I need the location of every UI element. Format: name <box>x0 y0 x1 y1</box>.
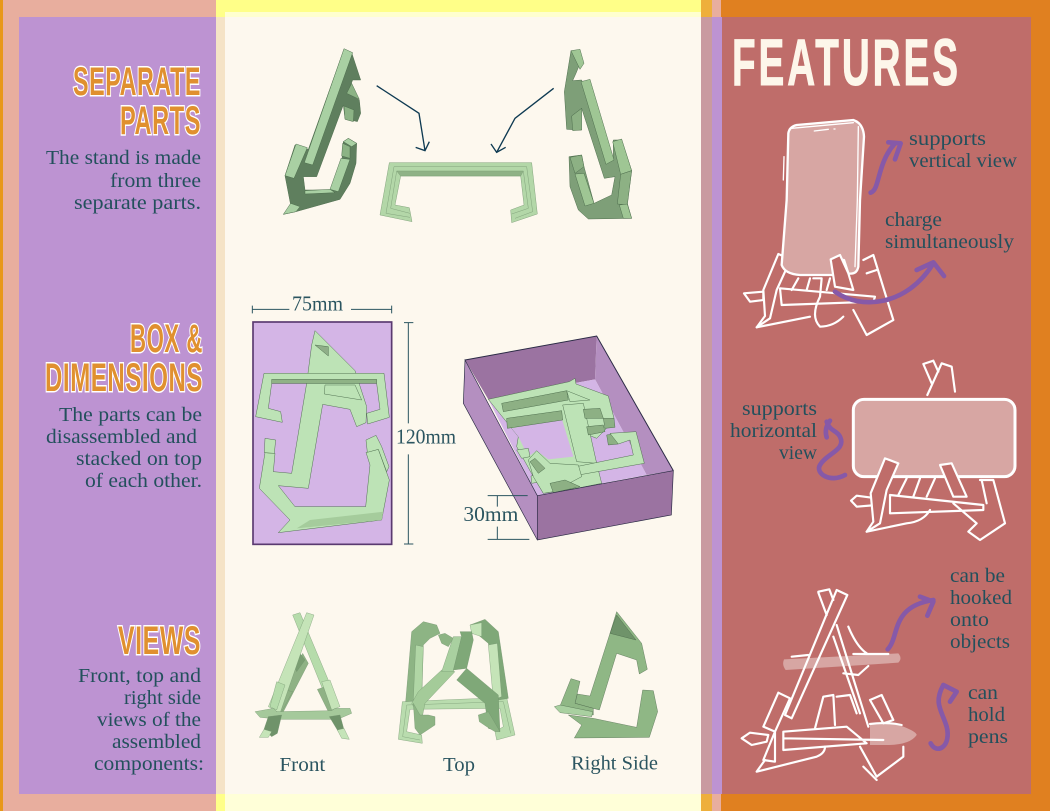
text: box description: of each other. <box>85 470 202 492</box>
label 120mm: 120mm <box>396 424 456 448</box>
arrow: horizontal view <box>819 421 845 478</box>
heading: separate parts <box>73 60 201 143</box>
sketch: stand behind phone <box>851 361 1005 540</box>
arrow: pens <box>931 685 957 749</box>
box outer left wall <box>463 360 537 540</box>
dimension 30mm <box>488 496 529 539</box>
label: supports vertical view: vertical view <box>909 150 1017 172</box>
diagram: flat box top view <box>252 292 456 544</box>
sketch: front uprights <box>831 255 853 290</box>
text: separate parts description <box>46 147 201 214</box>
heading: box and dimensions: BOX & <box>130 317 203 361</box>
sketch: A-frame stand <box>742 589 903 780</box>
label: can be hooked onto objects: hooked <box>950 587 1012 609</box>
centre bracket part <box>380 163 537 223</box>
label: front: Front <box>279 754 326 776</box>
front view <box>255 613 352 739</box>
label: top: Top <box>443 754 475 776</box>
label: can be hooked onto objects: objects <box>950 631 1010 653</box>
label: charge simultaneously: charge <box>885 209 942 231</box>
label: can be hooked onto objects <box>950 565 1012 653</box>
label: supports horizontal view: supports <box>742 398 817 420</box>
sketch: phone details <box>783 123 863 267</box>
diagram: separate parts <box>283 49 632 223</box>
diagram: assembled views <box>255 612 658 776</box>
dimension 120mm <box>404 323 413 544</box>
dimension 75mm <box>252 306 392 313</box>
sketch: front uprights <box>867 458 967 532</box>
box floor <box>488 379 647 496</box>
heading: separate parts: SEPARATE <box>73 60 201 104</box>
top view <box>398 619 515 743</box>
text: views description: Front, top and <box>78 665 201 687</box>
arrow: charging <box>835 262 944 302</box>
diagram: 3D box <box>463 336 673 540</box>
label: supports vertical view <box>909 128 1017 172</box>
box rim <box>465 336 673 471</box>
stacked parts <box>256 331 389 533</box>
label 75mm: 75mm <box>292 292 343 316</box>
heading: separate parts: PARTS <box>120 99 201 143</box>
heading: box and dimensions: DIMENSIONS <box>45 356 203 400</box>
sketch: phone upright <box>782 120 864 275</box>
feature: vertical view with charging <box>744 120 944 335</box>
label: can be hooked onto objects: can be <box>950 565 1005 587</box>
label: charge simultaneously <box>885 209 1015 253</box>
box inner right wall <box>595 336 673 475</box>
label: supports horizontal view <box>730 398 817 464</box>
text: separate parts description: from three <box>110 170 201 192</box>
text: box description: The parts can be <box>59 404 202 426</box>
text: box description: stacked on top <box>76 448 202 470</box>
label: can be hooked onto objects: onto <box>950 609 989 631</box>
label: can hold pens: can <box>968 682 998 704</box>
text: box description: disassembled and <box>46 426 197 448</box>
text: views description: views of the <box>97 709 201 731</box>
label: can hold pens: hold <box>968 704 1005 726</box>
arrow: right part to bracket <box>491 88 554 152</box>
label: can hold pens <box>968 682 1008 748</box>
sketch: phone landscape <box>853 399 1015 477</box>
arrow: left part to bracket <box>377 86 429 151</box>
text: separate parts description: separate parts. <box>74 192 201 214</box>
text: box description <box>46 404 202 492</box>
box inner back wall <box>465 336 597 399</box>
heading: box and dimensions <box>45 317 203 400</box>
right side view <box>554 612 658 738</box>
text: separate parts description: The stand is made <box>46 147 201 169</box>
label: charge simultaneously: simultaneously <box>885 231 1015 253</box>
feature: horizontal view <box>819 361 1015 540</box>
heading: views: VIEWS <box>118 619 201 663</box>
arrow: hooked <box>888 597 933 649</box>
panel: right red column <box>722 17 1031 794</box>
left part <box>283 49 361 214</box>
label: right side: Right Side <box>571 753 658 775</box>
text: views description: assembled <box>112 731 201 753</box>
text: views description: right side <box>124 687 201 709</box>
label: can hold pens: pens <box>968 726 1008 748</box>
text: views description <box>78 665 204 775</box>
label: supports horizontal view: horizontal <box>730 420 817 442</box>
panel: left purple column <box>19 17 216 794</box>
label 30mm: 30mm <box>463 502 518 526</box>
purple box rectangle <box>253 322 392 544</box>
label: supports horizontal view: view <box>779 442 817 464</box>
sketch: rod hooked <box>783 653 900 670</box>
label: supports vertical view: supports <box>909 128 986 150</box>
sketch: pen <box>870 724 917 745</box>
arrow: vertical view <box>871 142 901 193</box>
text: views description: components: <box>94 753 204 775</box>
stacked parts in box <box>488 378 644 493</box>
feature: hook and pens <box>742 589 957 780</box>
right part <box>564 49 632 219</box>
sketch: stand under phone <box>744 254 893 335</box>
box outer front wall <box>537 471 673 540</box>
